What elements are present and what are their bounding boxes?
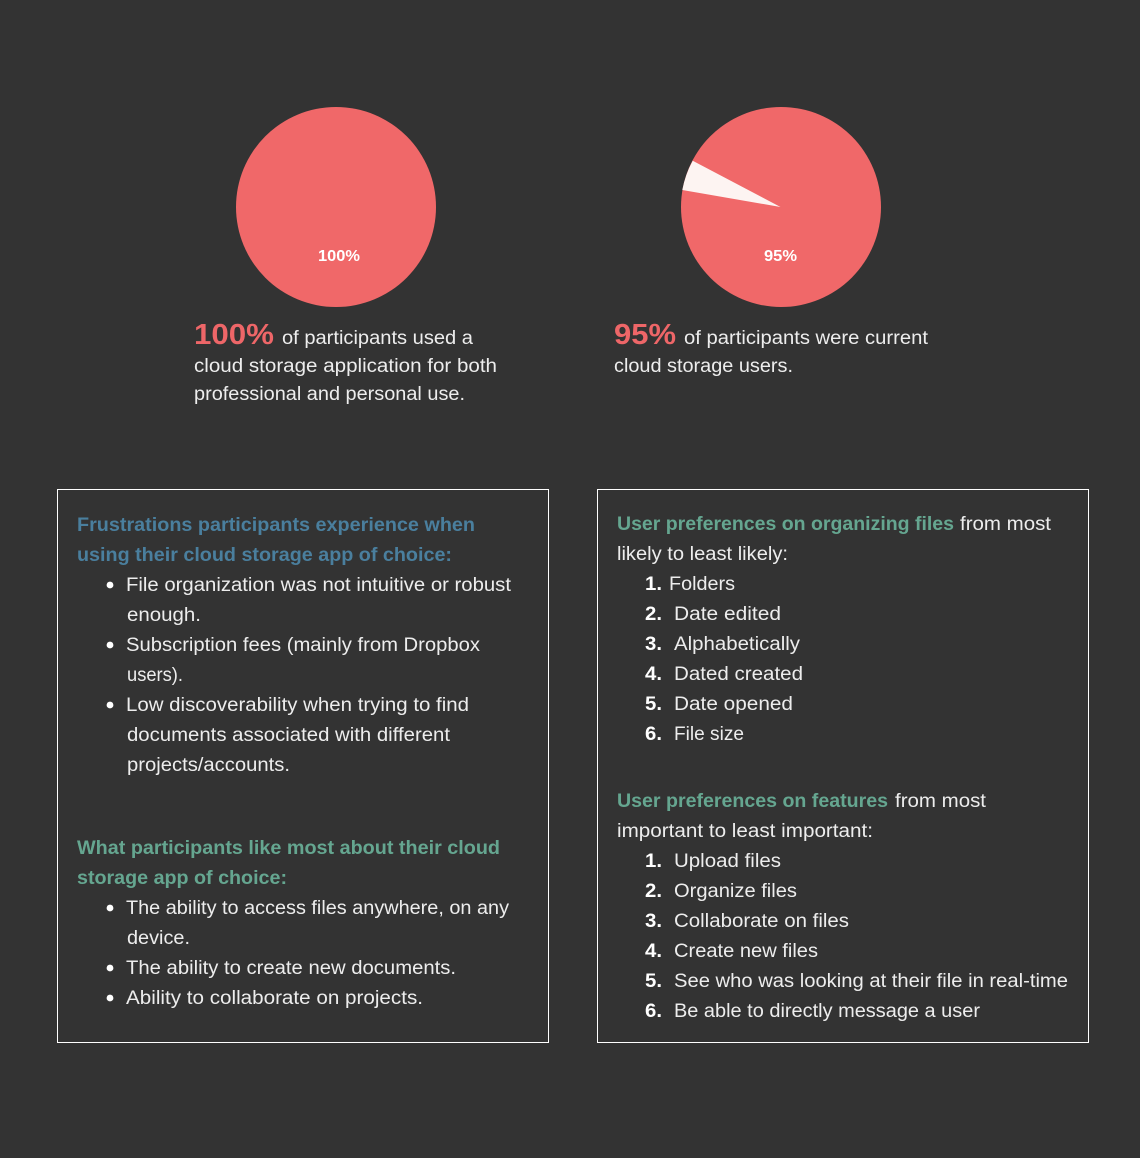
text block: 95% statistic [614,319,929,377]
list: frustrations [107,575,512,776]
ranked list: organizing files: 5. [645,694,662,715]
list: frustrations: Low discoverability when trying to find [126,695,469,716]
ranked list: organizing files: Folders [669,574,735,595]
list: frustrations: enough. [127,605,201,626]
ranked list: organizing files: Date edited [674,604,781,625]
heading: what participants like [77,838,500,889]
ranked list: features: 2. [645,881,662,902]
heading: preferences on organizing files: from most [960,514,1052,535]
list: what participants like: The ability to access files anywhere, on any [126,898,510,919]
ranked list: features: Upload files [674,851,781,872]
ranked list: organizing files: Alphabetically [674,634,801,655]
ranked list: features: See who was looking at their file in real-time [674,971,1068,992]
ranked list: features: 6. [645,1001,662,1022]
ranked list: features: 4. [645,941,662,962]
text block: 95% statistic: of participants were current [684,328,929,349]
list: what participants like [107,898,510,1009]
list: what participants like: device. [127,928,190,949]
list: frustrations: users). [127,665,183,686]
panel: user preferences [598,490,1088,1042]
ranked list: features: Organize files [674,881,797,902]
heading: what participants like: What participants like most about their cloud [77,838,500,859]
text block: 100% statistic: professional and personal use. [194,384,465,405]
ranked list: organizing files: 3. [645,634,662,655]
ranked list: features: 3. [645,911,662,932]
list: frustrations: Subscription fees (mainly from Dropbox [126,635,481,656]
list: what participants like: Ability to collaborate on projects. [126,988,423,1009]
ranked list: features: Collaborate on files [674,911,849,932]
ranked list: organizing files: File size [674,724,744,745]
text block: 100% statistic [194,319,497,405]
heading: preferences on organizing files: likely to least likely: [617,544,788,565]
heading: what participants like: storage app of choice: [77,868,287,889]
pie chart: 95% [681,107,881,307]
pie chart: 100% [236,107,436,307]
heading: preferences on organizing files: User preferences on organizing files [617,514,954,535]
ranked list: organizing files: 6. [645,724,662,745]
heading: preferences on features: important to least important: [617,821,873,842]
list: frustrations: File organization was not intuitive or robust [126,575,512,596]
ranked list: features: 1. [645,851,662,872]
ranked list: features [645,851,1068,1022]
pie chart: 95%: 95% [764,248,797,265]
list: what participants like: The ability to create new documents. [126,958,456,979]
text block: 100% statistic: of participants used a [282,328,473,349]
text block: 100% statistic: cloud storage application for both [194,356,497,377]
ranked list: organizing files: 4. [645,664,662,685]
ranked list: organizing files: Dated created [674,664,803,685]
heading: preferences on features: from most [895,791,987,812]
pie chart: 100%: 100% [318,248,360,265]
ranked list: features: Be able to directly message a user [674,1001,981,1022]
list: frustrations: projects/accounts. [127,755,290,776]
heading: preferences on features: User preferences on features [617,791,888,812]
ranked list: organizing files [645,574,803,745]
heading: frustrations: using their cloud storage app of choice: [77,545,452,566]
panel: frustrations and likes [58,490,548,1042]
text block: 100% statistic: 100% [194,319,274,351]
ranked list: features: Create new files [674,941,818,962]
heading: frustrations: Frustrations participants experience when [77,515,475,536]
heading: preferences on features [617,791,987,842]
ranked list: organizing files: 2. [645,604,662,625]
heading: frustrations [77,515,475,566]
ranked list: organizing files: 1. [645,574,662,595]
ranked list: features: 5. [645,971,662,992]
text block: 95% statistic: 95% [614,319,676,351]
ranked list: organizing files: Date opened [674,694,793,715]
list: frustrations: documents associated with different [127,725,451,746]
text block: 95% statistic: cloud storage users. [614,356,793,377]
heading: preferences on organizing files [617,514,1052,565]
